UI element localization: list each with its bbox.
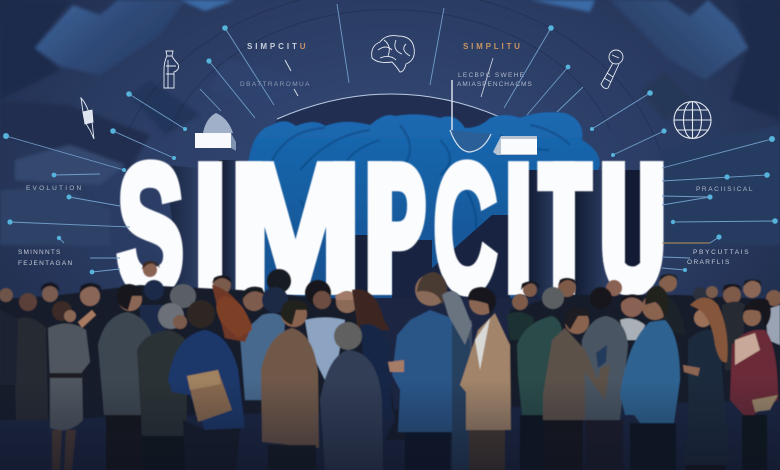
icon: pen <box>81 98 94 139</box>
icon: figure / bottle <box>164 51 178 88</box>
title: SIMPCITU: I <box>504 129 533 329</box>
icon: globe <box>674 102 711 138</box>
person: veiled grey figure <box>442 291 472 345</box>
person: man in bright blue jacket <box>620 286 680 470</box>
title: SIMPCITU: T <box>539 127 591 328</box>
title: SIMPCITU: C <box>433 129 497 329</box>
person: woman in plaid jacket <box>320 322 383 470</box>
back row of people <box>0 261 780 420</box>
label: SMINNNTS: SMINNNTS <box>18 249 62 256</box>
person: man in blue suit <box>388 272 470 470</box>
title: SIMPCITU: U <box>599 128 667 329</box>
person: dark jacket, grey hair <box>137 303 188 470</box>
title: SIMPCITU: M <box>229 128 361 328</box>
title: SIMPCITU <box>117 127 667 329</box>
person: woman in floral dress <box>683 298 730 470</box>
title: SIMPCITU: S <box>117 127 184 328</box>
crowd of people <box>0 261 780 470</box>
brain backdrop disc and arc <box>250 94 530 170</box>
dark mass behind the crowd <box>0 285 780 440</box>
title: SIMPCITU: P <box>364 128 426 329</box>
glass drop and vertical light above second I <box>450 80 491 152</box>
person: man in grey jacket <box>582 287 628 470</box>
label: SIMPCITU: SIMPCITU <box>247 42 308 51</box>
person: man in tan jacket <box>460 287 511 470</box>
block dot of second I <box>493 136 537 155</box>
icon: brain outline <box>372 36 414 72</box>
label: PRACIISICAL: PRACIISICAL <box>696 186 754 193</box>
floor shadow gradient over the legs <box>0 380 780 470</box>
person: man in brown jacket with phone <box>543 307 610 470</box>
person: woman in maroon scarf <box>730 299 778 470</box>
person: man in green coat <box>517 287 564 470</box>
label: DBATTRAROMUA: DBATTRAROMUA <box>240 81 311 88</box>
blue brain <box>248 112 600 300</box>
label: AMIASPENCHACMS: AMIASPENCHACMS <box>457 81 533 88</box>
small tick marks near labels <box>285 58 493 97</box>
title: SIMPCITU: I <box>193 128 227 329</box>
block dot of first I <box>195 133 236 151</box>
label: LECBPC SWEHE: LECBPC SWEHE <box>458 72 525 79</box>
label: ORARFLIS: ORARFLIS <box>687 259 731 266</box>
cone above first I <box>203 113 233 133</box>
connector lines with dots <box>3 4 778 274</box>
label: PBYCUTTAIS: PBYCUTTAIS <box>693 249 750 256</box>
person: woman in patterned dress <box>48 301 96 470</box>
person: man in brown jacket <box>261 300 319 470</box>
person: dark coat far left <box>0 293 48 420</box>
label: SIMPLITU: SIMPLITU <box>463 42 523 51</box>
dark 3D extrusion of the letters <box>150 160 642 305</box>
person: woman in navy blazer <box>168 296 252 470</box>
label: FEJENTAGAN: FEJENTAGAN <box>18 260 74 267</box>
shoulder bag <box>187 370 232 422</box>
label: EVOLUTION: EVOLUTION <box>26 185 83 192</box>
person: man in grey jacket <box>98 284 154 470</box>
floor <box>0 298 780 470</box>
icon: key / tool <box>601 50 623 88</box>
